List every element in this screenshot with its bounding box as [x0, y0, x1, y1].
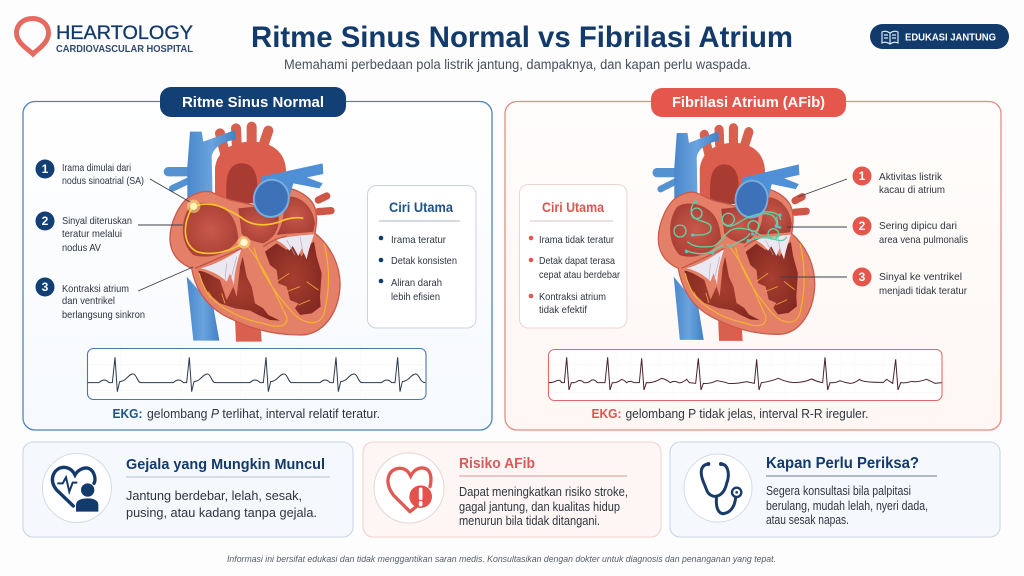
ECG caption: gelombang P terlihat, interval relatif teratur.	[147, 406, 380, 421]
icon: logo pin heart	[16, 18, 48, 54]
card text	[459, 485, 628, 528]
key features box: Irama tidak teratur	[539, 234, 614, 246]
badge: Edukasi Jantung	[870, 24, 1009, 49]
callout 1: 1	[859, 169, 866, 183]
callout 2: teratur melalui	[62, 228, 122, 240]
card text: atau sesak napas.	[766, 513, 849, 527]
icon: heart with person	[42, 454, 112, 522]
card: Gejala yang Mungkin Muncul	[23, 442, 353, 537]
icon: open book	[882, 31, 898, 44]
key features box: Ciri Utama	[389, 200, 453, 215]
card text: Jantung berdebar, lelah, sesak,	[126, 488, 302, 503]
callout 3: Sinyal ke ventrikel	[879, 271, 962, 283]
panel: Ritme Sinus Normal	[23, 87, 492, 430]
callout 1: kacau di atrium	[879, 184, 945, 196]
callout 3	[780, 268, 967, 297]
card text	[766, 484, 928, 527]
key features box: Irama teratur	[391, 234, 446, 246]
card text: pusing, atau kadang tanpa gejala.	[126, 505, 317, 520]
panel: Fibrilasi Atrium	[505, 88, 1001, 430]
callout 1: Aktivitas listrik	[879, 171, 943, 183]
card: Risiko AFib	[363, 442, 661, 537]
card text	[126, 488, 317, 520]
callout 1: 1	[42, 162, 49, 176]
card: Kapan Perlu Periksa	[670, 442, 1000, 537]
callout 2: area vena pulmonalis	[879, 234, 968, 246]
callout 3	[36, 267, 193, 321]
logo wordmark: HEARTOLOGY	[56, 22, 193, 44]
key features box: Aliran darah	[391, 277, 442, 289]
title: Ritme Sinus Normal vs Fibrilasi Atrium	[251, 21, 793, 54]
ECG caption: EKG:	[592, 406, 622, 421]
logo: Heartology	[16, 18, 193, 55]
ECG chart: irregular rhythm	[548, 350, 942, 400]
callout 3: 3	[42, 280, 49, 294]
callout 1	[36, 160, 190, 202]
key features box: Ciri Utama	[542, 200, 604, 215]
key features box	[520, 184, 627, 328]
callout 3: 3	[859, 270, 866, 284]
callout 2: nodus AV	[62, 242, 101, 254]
panel heading pill	[651, 88, 846, 117]
key features box: tidak efektif	[539, 304, 587, 316]
panel heading pill: Fibrilasi Atrium (AFib)	[672, 94, 825, 111]
callout 1	[798, 166, 945, 197]
ECG chart: regular rhythm	[88, 348, 426, 400]
callout 2: Sering dipicu dari	[879, 220, 957, 232]
callout 1: nodus sinoatrial (SA)	[62, 175, 144, 187]
callout 3: menjadi tidak teratur	[879, 285, 967, 297]
card text: berulang, mudah lelah, nyeri dada,	[766, 499, 928, 513]
ECG caption: gelombang P tidak jelas, interval R-R ireguler.	[626, 406, 868, 421]
card heading: Kapan Perlu Periksa?	[766, 455, 919, 472]
callout 3: berlangsung sinkron	[62, 309, 145, 321]
card text: Dapat meningkatkan risiko stroke,	[459, 485, 628, 499]
logo tagline: CARDIOVASCULAR HOSPITAL	[56, 44, 193, 55]
card text: menurun bila tidak ditangani.	[459, 514, 600, 528]
callout 3: dan ventrikel	[62, 295, 115, 307]
card heading: Gejala yang Mungkin Muncul	[126, 456, 325, 473]
callout 2: Sinyal diteruskan	[62, 215, 132, 227]
subtitle: Memahami perbedaan pola listrik jantung, dampaknya, dan kapan perlu waspada.	[284, 57, 751, 72]
ECG caption: EKG:	[112, 406, 142, 421]
key features box: cepat atau berdebar	[539, 269, 620, 281]
heart diagram: chaotic atrial signals	[657, 128, 815, 341]
icon: heart alert	[374, 453, 444, 523]
icon: stethoscope	[684, 454, 752, 522]
card text: Segera konsultasi bila palpitasi	[766, 484, 911, 498]
panel heading pill: Ritme Sinus Normal	[182, 94, 324, 111]
badge label: EDUKASI JANTUNG	[905, 32, 996, 44]
callout 2	[36, 212, 183, 254]
heart diagram: normal conduction	[168, 127, 340, 342]
key features box: lebih efisien	[391, 291, 440, 303]
callout 3: Kontraksi atrium	[62, 283, 129, 295]
card heading: Risiko AFib	[459, 455, 535, 472]
callout 2	[787, 216, 968, 246]
callout 2: 2	[42, 214, 49, 228]
key features box: Kontraksi atrium	[539, 291, 606, 303]
panel heading pill	[160, 87, 346, 117]
key features box: Detak dapat terasa	[539, 255, 615, 267]
key features box: Detak konsisten	[391, 255, 457, 267]
footer disclaimer: Informasi ini bersifat edukasi dan tidak menggantikan saran medis. Konsultasikan dengan dokter untuk diagnosis dan penanganan yang tepat.	[227, 554, 776, 564]
callout 1: Irama dimulai dari	[62, 162, 131, 174]
card text: gagal jantung, dan kualitas hidup	[459, 500, 620, 514]
callout 2: 2	[859, 219, 866, 233]
key features box	[368, 186, 476, 328]
